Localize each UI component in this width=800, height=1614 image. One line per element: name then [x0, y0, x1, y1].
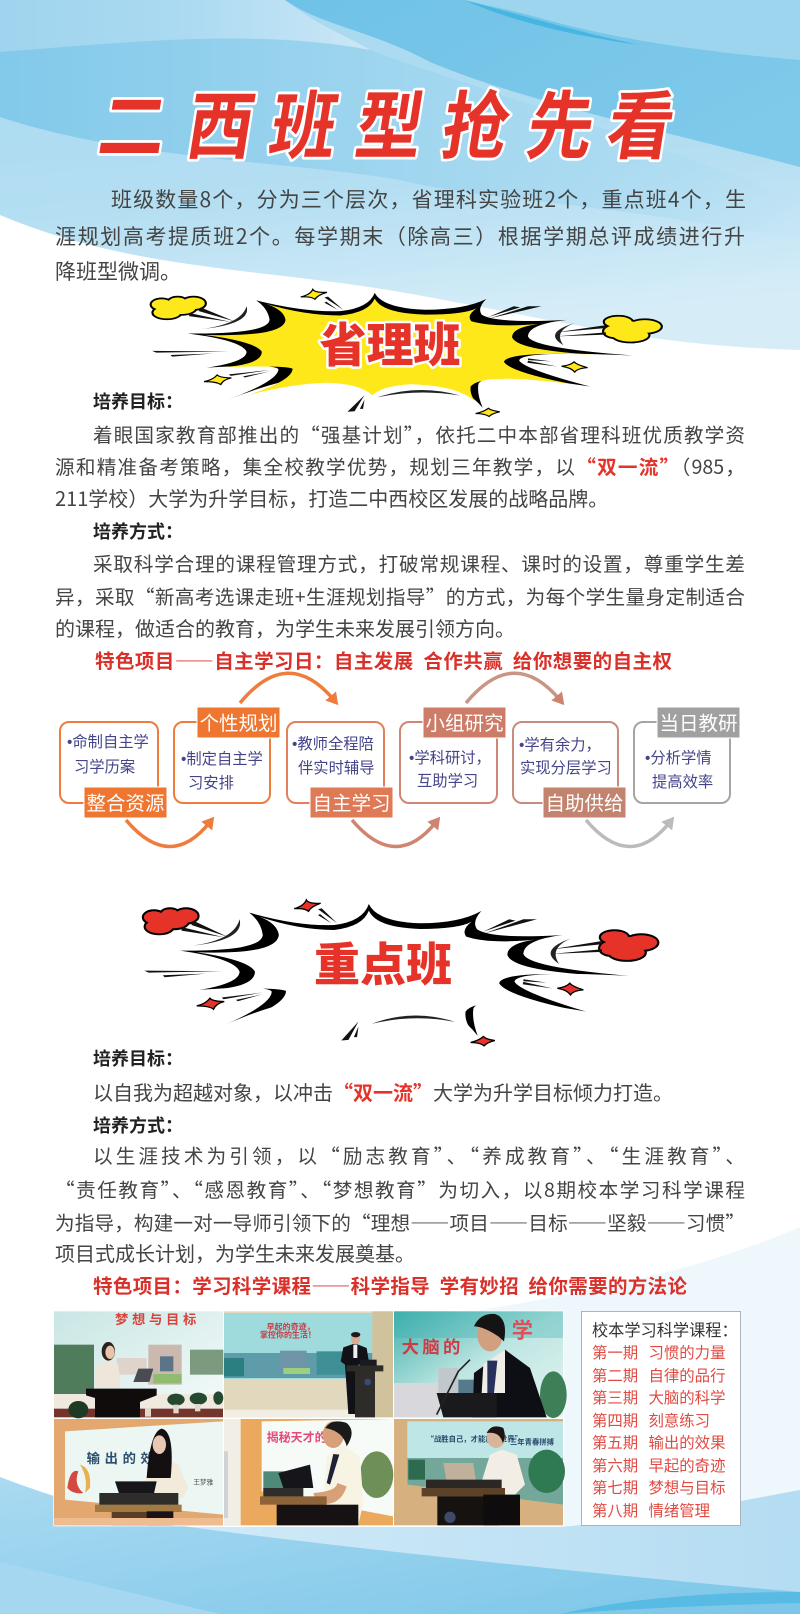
step texts: •分析学情: [645, 746, 712, 768]
intro paragraph: 涯规划高考提质班2个。每学期末（除高三）根据学期总评成绩进行升: [55, 221, 745, 251]
arrow 3: [352, 820, 436, 847]
step box 5: [513, 722, 618, 803]
section 1: method text: 异，采取“新高考选课走班+生涯规划指导”的方式，为每个学生量身定制适合: [55, 581, 745, 610]
step labels: 当日教研: [659, 707, 738, 736]
burst sparkles: [197, 900, 583, 1046]
step texts: 伴实时辅导: [298, 756, 374, 778]
course list box: 校本学习科学课程：: [592, 1317, 738, 1341]
photo 4: [54, 1419, 223, 1525]
photo 3: [394, 1311, 567, 1418]
step labels: 整合资源: [86, 787, 165, 816]
section 2: goal heading: 培养目标：: [93, 1045, 183, 1071]
feature heading 2: 特色项目：学习科学课程——科学指导 学有妙招 给你需要的方法论: [93, 1270, 687, 1299]
section 1: method text: [55, 548, 745, 642]
step box 1: [60, 722, 158, 803]
burst clouds: [152, 298, 661, 342]
burst label 重点班: 重点班: [314, 929, 452, 995]
burst clouds: [144, 909, 657, 960]
step labels: [84, 707, 740, 818]
step texts: •学科研讨，: [409, 746, 491, 768]
intro paragraph: 降班型微调。: [55, 256, 181, 286]
photo 2: 早起的奇迹，: [267, 1322, 315, 1333]
photo 5: [224, 1419, 393, 1525]
section 1: method text: 的课程，做适合的教育，为学生未来发展引领方向。: [55, 613, 515, 642]
section 1: goal text: [55, 419, 745, 512]
step box 6: [634, 722, 730, 803]
photo 3: 学: [512, 1314, 533, 1345]
step labels: 自助供给: [545, 787, 624, 816]
section 2: method heading: 培养方式：: [93, 1112, 183, 1138]
step texts: •制定自主学: [181, 747, 263, 769]
photo 6: [394, 1419, 565, 1525]
step box 4: [400, 722, 497, 803]
burst: 重点班: [142, 898, 660, 1047]
section 1: goal text: 着眼国家教育部推出的“强基计划”，依托二中本部省理科班优质教学资: [93, 419, 745, 448]
photo 2: 掌控你的生活！: [260, 1329, 316, 1340]
photo 1: [54, 1309, 223, 1418]
step texts: •学有余力，: [519, 733, 601, 755]
section 2: method text: “责任教育”、“感恩教育”、“梦想教育”为切入，以8期校本学习科学课程: [55, 1174, 745, 1203]
intro paragraph: [55, 184, 746, 286]
section 2: method text: 为指导，构建一对一导师引领下的“理想——项目——目标——坚毅——习惯”: [55, 1207, 745, 1236]
step texts: 互助学习: [417, 769, 478, 791]
step texts: [67, 730, 713, 793]
title: 二西班型抢先看: [92, 67, 683, 174]
arrow 1: [126, 820, 210, 847]
step texts: •命制自主学: [67, 730, 149, 752]
section 1: method text: 采取科学合理的课程管理方式，打破常规课程、课时的设置，尊重学生差: [93, 548, 745, 577]
step texts: 提高效率: [652, 770, 713, 792]
step box 3: [287, 722, 384, 803]
step texts: •教师全程陪: [292, 732, 374, 754]
photo 4: 王梦雅: [193, 1477, 214, 1487]
photo 5: 揭秘天才的密: [267, 1428, 339, 1445]
step texts: 习安排: [188, 771, 234, 793]
step labels: 个性规划: [199, 707, 278, 736]
section 2: method text: 项目式成长计划，为学生未来发展奠基。: [55, 1238, 415, 1267]
course list box: [581, 1311, 741, 1526]
photo 1 slide title: 梦想与目标: [115, 1309, 200, 1328]
section 1: goal text: 211学校）大学为升学目标，打造二中西校区发展的战略品牌。: [55, 483, 608, 512]
section 1: goal heading: 培养目标：: [93, 388, 183, 414]
arrow 5: [586, 820, 670, 847]
arrow 4: [466, 673, 560, 703]
burst: 省理班: [150, 288, 663, 418]
feature heading 1: 特色项目——自主学习日：自主发展 合作共赢 给你想要的自主权: [95, 645, 672, 674]
section 2: method text: 以生涯技术为引领，以“励志教育”、“养成教育”、“生涯教育”、: [93, 1140, 745, 1169]
burst label 省理班: 省理班: [320, 307, 460, 376]
section 2: goal text: 以自我为超越对象，以冲击“双一流”大学为升学目标倾力打造。: [93, 1077, 673, 1106]
section 1: goal text: 源和精准备考策略，集全校教学优势，规划三年教学，以“双一流”（985，: [55, 451, 745, 480]
photo 4: 输出的效果: [87, 1448, 177, 1467]
photo 3: 大脑的: [402, 1333, 464, 1358]
course list box: 第一期 习惯的力量 第二期 自律的品行 第三期 大脑的科学 第四期 刻意练习 第五期 输出的效果 第六期 早起的奇迹 第七期 梦想与目标 第八期 情绪管理: [592, 1341, 725, 1521]
photo 2: [224, 1311, 393, 1417]
section 2: method text: [55, 1140, 745, 1267]
photo 6: 三年青春拼搏: [510, 1437, 555, 1448]
step box 2: [174, 722, 270, 803]
step labels: 自主学习: [312, 787, 391, 816]
step labels: 小组研究: [425, 707, 504, 736]
step texts: 实现分层学习: [520, 756, 612, 778]
section 1: method heading: 培养方式：: [93, 518, 183, 544]
photo 6: “战胜自己，才能放眼世界”: [427, 1433, 522, 1444]
arrow 2: [240, 673, 334, 703]
step texts: 习学历案: [74, 755, 135, 777]
flow diagram: [59, 672, 740, 848]
burst sparkles: [204, 289, 587, 416]
intro paragraph: 班级数量8个，分为三个层次，省理科实验班2个，重点班4个，生: [111, 184, 746, 214]
